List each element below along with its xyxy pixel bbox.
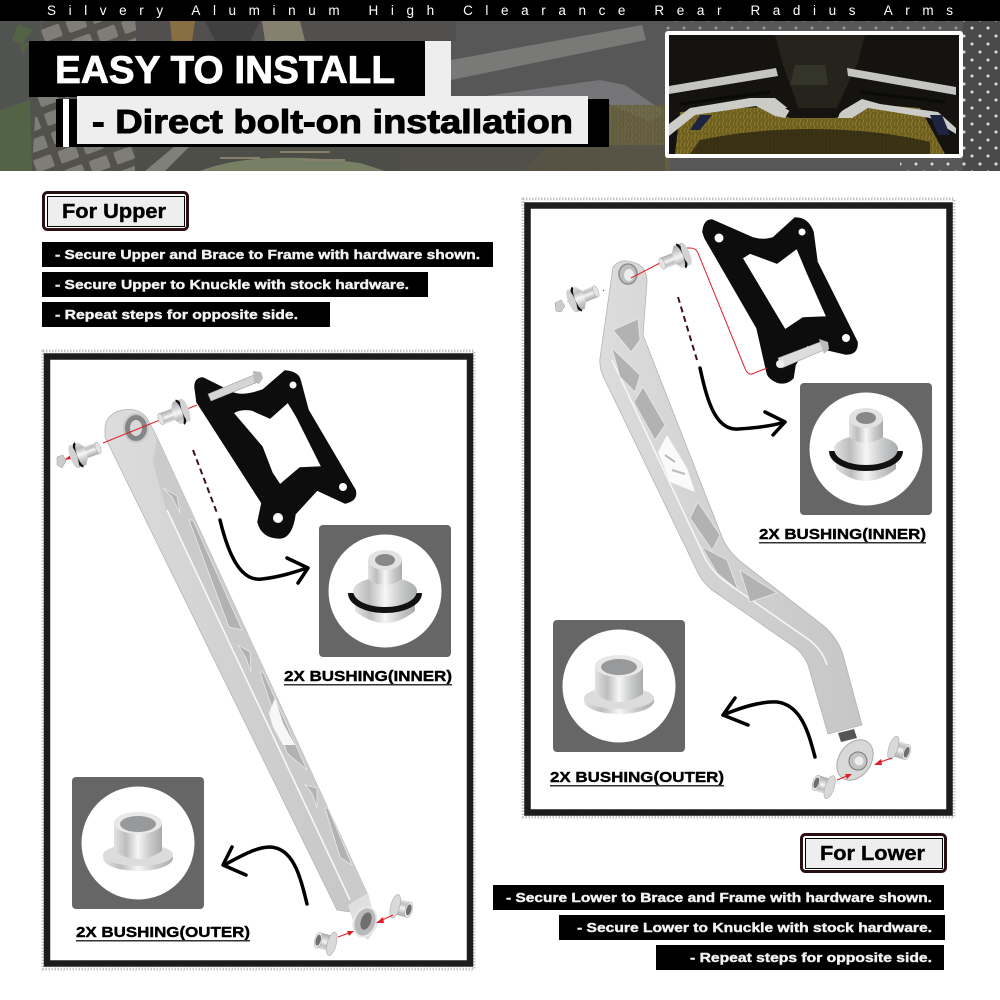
lower instructions: - Repeat steps for opposite side. <box>690 951 932 965</box>
upper outer bushing label: 2X BUSHING(OUTER) <box>76 924 250 941</box>
upper bracket <box>195 371 356 538</box>
lower bracket bolt <box>778 342 824 368</box>
upper arm logo <box>269 698 295 745</box>
upper arm bearing <box>124 414 148 442</box>
heading: easy to install: EASY TO INSTALL <box>55 49 395 92</box>
installed arms photo <box>665 31 963 158</box>
upper arm <box>105 409 367 913</box>
section label: for upper: For Upper <box>62 201 166 223</box>
lower spacers and bolt <box>655 241 694 276</box>
upper spacers and bolt <box>154 398 193 431</box>
upper bracket bolt <box>208 375 258 401</box>
subheading: direct bolt-on installation: - Direct bolt-on installation <box>92 103 573 140</box>
lower arrow to outer bushing <box>723 698 815 757</box>
lower bracket <box>703 218 857 383</box>
upper instructions: - Secure Upper and Brace to Frame with hardware shown. <box>55 248 480 262</box>
lower red guide lines <box>603 248 767 374</box>
lower inner bushing card <box>800 383 932 515</box>
lower outer bushing label: 2X BUSHING(OUTER) <box>550 769 724 786</box>
top title bar <box>0 0 1000 21</box>
upper rod end and outer spacers <box>348 893 378 940</box>
upper dashed guide <box>193 450 217 513</box>
lower instructions <box>493 885 945 970</box>
lower arrow to inner bushing <box>700 368 785 435</box>
panel: lower arm diagram <box>523 199 954 817</box>
top title bar: Silvery Aluminum High Clearance Rear Radius Arms <box>47 3 953 18</box>
section label: for lower: For Lower <box>820 843 925 865</box>
upper instructions: - Secure Upper to Knuckle with stock hardware. <box>55 278 409 292</box>
upper arrow to inner bushing <box>220 520 308 583</box>
heading: easy to install <box>29 41 451 97</box>
lower outer bushing card <box>553 620 685 752</box>
upper inner bushing label: 2X BUSHING(INNER) <box>284 668 452 685</box>
lower rod end and outer spacers <box>838 729 857 742</box>
upper instructions: - Repeat steps for opposite side. <box>55 308 298 322</box>
section label: for lower <box>802 834 946 872</box>
upper outer bushing card <box>72 777 204 909</box>
lower instructions: - Secure Lower to Brace and Frame with hardware shown. <box>506 891 932 905</box>
panel: upper arm diagram <box>43 351 474 969</box>
subheading: direct bolt-on installation <box>56 96 609 147</box>
lower arm logo <box>658 435 695 492</box>
section label: for upper <box>44 192 188 230</box>
header photo banner <box>0 21 1000 171</box>
lower inner bushing label: 2X BUSHING(INNER) <box>759 526 926 543</box>
upper instructions <box>42 242 493 327</box>
upper arrow to outer bushing <box>223 847 307 904</box>
lower dashed guide <box>678 297 697 360</box>
lower arm bearing <box>619 264 637 284</box>
lower arm <box>600 261 862 734</box>
lower instructions: - Secure Lower to Knuckle with stock hardware. <box>577 921 932 935</box>
upper red axis line <box>68 405 197 458</box>
upper inner bushing card <box>319 525 451 657</box>
